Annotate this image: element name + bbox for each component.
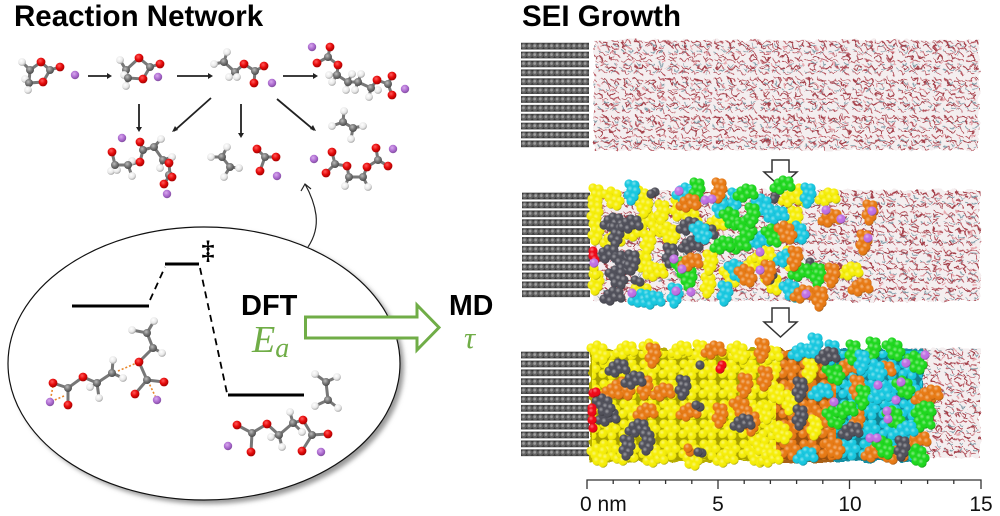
molecule: branched product <box>107 134 176 198</box>
arrow: DFT to MD <box>306 305 439 350</box>
label: DFT: DFT <box>241 290 298 322</box>
panel: DFT barrier ellipse <box>8 227 404 504</box>
ellipse shadow <box>12 230 404 504</box>
molecule: dimer product <box>308 43 409 101</box>
title: Reaction Network: Reaction Network <box>14 0 264 33</box>
graphite anode <box>521 351 589 457</box>
molecule: ethylene carbonate and Li <box>18 58 79 94</box>
molecule: products <box>224 370 342 456</box>
scale axis in nm: 10 <box>838 493 862 516</box>
molecule: ethylene and EDC <box>310 107 397 191</box>
molecule: reactants <box>46 317 168 409</box>
label: activation energy: E <box>252 319 275 361</box>
panel: SEI growth stage 2 <box>522 175 980 312</box>
panel: reaction network molecules <box>18 43 409 198</box>
title: SEI Growth: SEI Growth <box>522 0 681 33</box>
graphite anode <box>521 42 589 148</box>
graphite anode <box>522 192 590 298</box>
label: activation energy: a <box>275 333 289 364</box>
double dagger: ‡ <box>202 236 214 265</box>
arrow: stage 2 to 3 <box>764 308 797 337</box>
SEI species clusters <box>586 175 879 312</box>
panel: SEI growth stage 1 <box>521 40 979 150</box>
label: tau: τ <box>464 320 477 355</box>
molecule: EC with bound Li <box>116 54 164 90</box>
label: MD: MD <box>449 290 493 322</box>
ellipse <box>8 227 400 500</box>
scale axis in nm <box>580 480 993 516</box>
solvent box <box>900 348 980 458</box>
SEI base layers <box>590 349 923 462</box>
panel: SEI growth stage 3 <box>521 332 980 471</box>
energy profile <box>72 264 304 395</box>
callout pointer arrow <box>301 184 316 247</box>
SEI species clusters <box>586 332 944 471</box>
arrows: reaction steps <box>88 73 318 138</box>
solvent box <box>594 190 980 301</box>
scale axis in nm: 15 <box>969 493 993 516</box>
scale axis in nm: 5 <box>712 493 724 516</box>
scale axis in nm: 0 nm <box>580 493 627 516</box>
arrow: stage 1 to 2 <box>764 160 797 187</box>
molecule: ethylene and carbonate <box>207 143 281 181</box>
solvent box <box>594 40 979 150</box>
molecule: ring-opened radical <box>210 48 276 87</box>
